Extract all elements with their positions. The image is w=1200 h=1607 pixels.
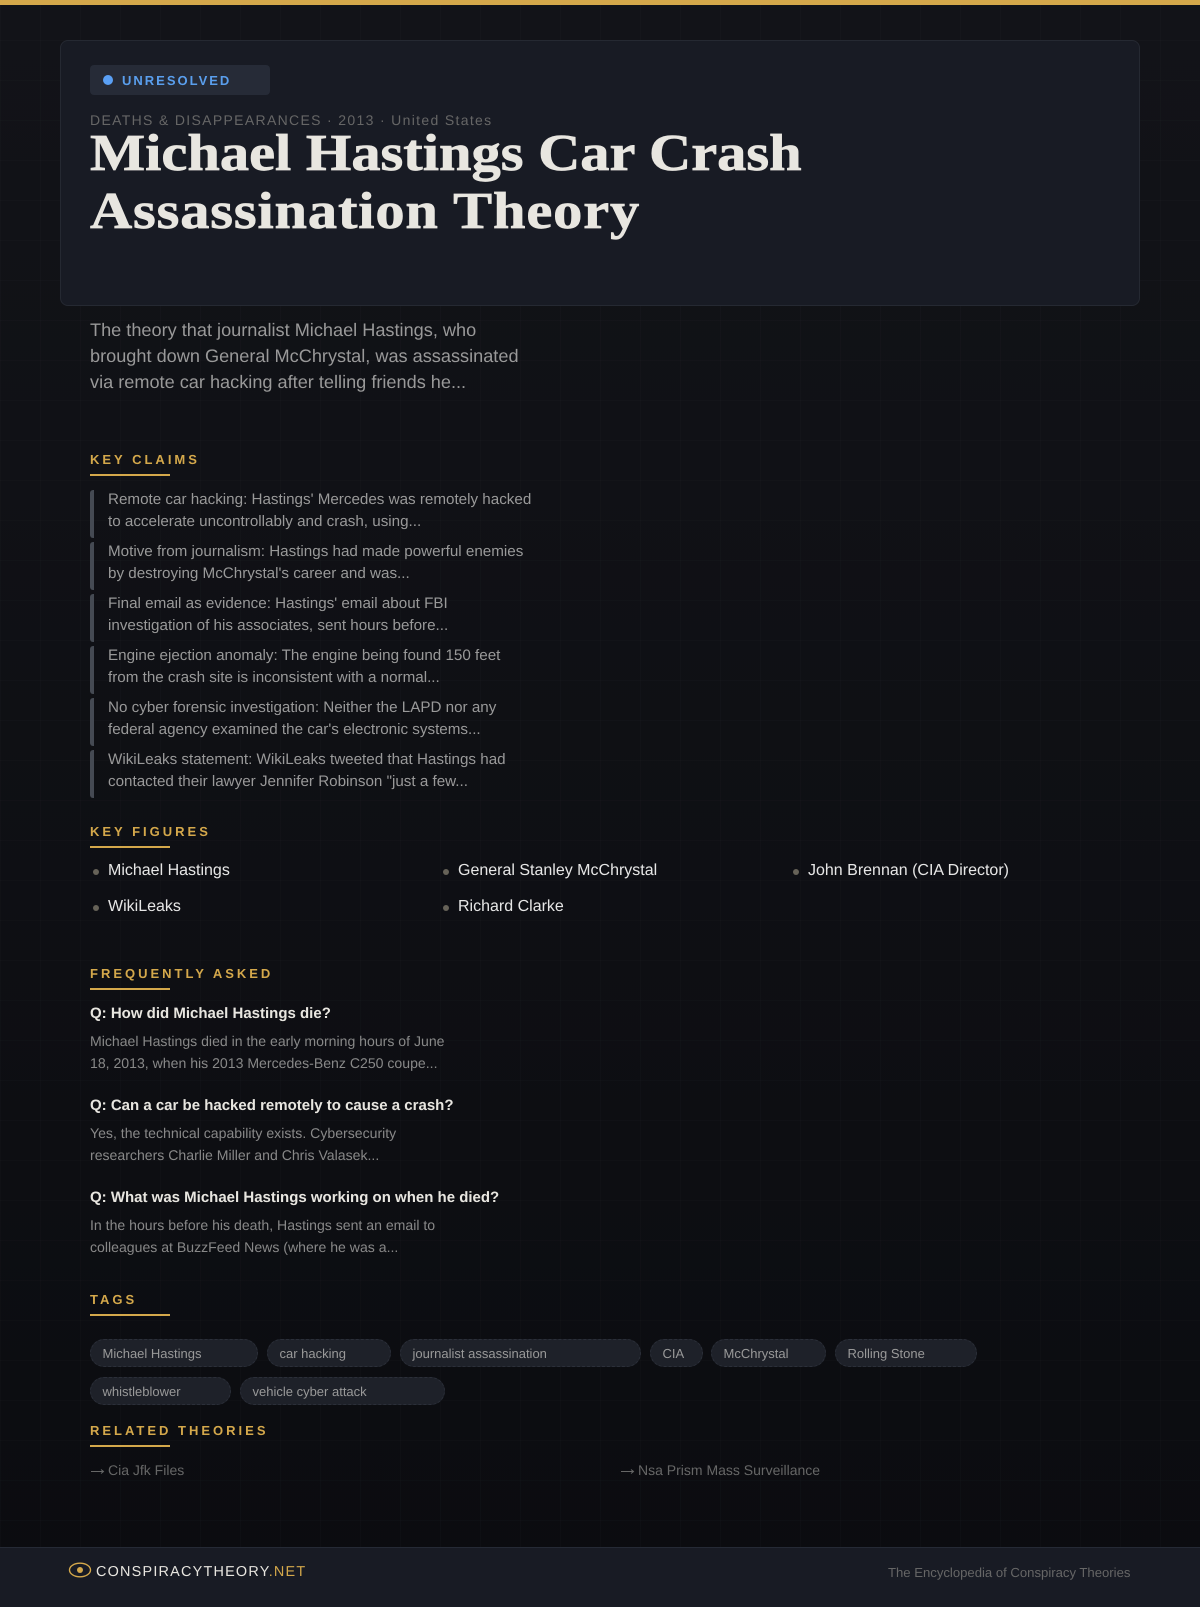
claim 6: contacted their lawyer Jennifer Robinson "just a few...	[108, 773, 468, 790]
tag list	[90, 1339, 977, 1405]
tag	[267, 1339, 391, 1367]
title	[90, 125, 802, 240]
heading: key claims: KEY CLAIMS	[90, 452, 200, 467]
question 1: Q: How did Michael Hastings die?	[90, 1005, 331, 1022]
footer	[0, 1547, 1200, 1607]
claim 3	[90, 594, 540, 642]
related link 1: Cia Jfk Files	[108, 1462, 184, 1478]
title: Michael Hastings Car Crash	[90, 125, 802, 182]
answer 2: researchers Charlie Miller and Chris Valasek...	[90, 1147, 379, 1163]
figure: John Brennan: John Brennan (CIA Director)	[808, 862, 1009, 879]
heading: frequently asked: FREQUENTLY ASKED	[90, 966, 273, 981]
tag: vehicle cyber attack	[252, 1384, 367, 1399]
tag	[650, 1339, 703, 1367]
lead summary: brought down General McChrystal, was assassinated	[90, 346, 519, 366]
tag: whistleblower	[102, 1384, 181, 1399]
answer 3	[90, 1217, 435, 1255]
claim 4: Engine ejection anomaly: The engine being found 150 feet	[108, 647, 500, 664]
figure: Richard Clarke: Richard Clarke	[458, 898, 564, 915]
answer 1: Michael Hastings died in the early morning hours of June	[90, 1033, 444, 1049]
icon: status dot	[103, 75, 113, 85]
lead summary	[90, 320, 519, 392]
claim 3: investigation of his associates, sent hours before...	[108, 617, 448, 634]
answer 1: 18, 2013, when his 2013 Mercedes-Benz C250 coupe...	[90, 1055, 438, 1071]
answer 1	[90, 1033, 444, 1071]
answer 2	[90, 1125, 396, 1163]
tag	[400, 1339, 641, 1367]
figures list	[93, 862, 1009, 915]
tag: Rolling Stone	[848, 1346, 925, 1361]
panel: header	[60, 40, 1140, 306]
claim 4: from the crash site is inconsistent with a normal...	[108, 669, 440, 686]
lead summary: The theory that journalist Michael Hastings, who	[90, 320, 476, 340]
answer 3: In the hours before his death, Hastings sent an email to	[90, 1217, 435, 1233]
question 2: Q: Can a car be hacked remotely to cause a crash?	[90, 1097, 454, 1114]
answer 2: Yes, the technical capability exists. Cybersecurity	[90, 1125, 396, 1141]
heading: key figures: KEY FIGURES	[90, 824, 211, 839]
icon: eye logo	[68, 1562, 92, 1578]
tag	[90, 1377, 231, 1405]
tag: CIA	[662, 1346, 684, 1361]
heading: related theories: RELATED THEORIES	[90, 1423, 268, 1438]
tag: McChrystal	[724, 1346, 789, 1361]
top accent bar	[0, 0, 1200, 5]
claim 1: to accelerate uncontrollably and crash, using...	[108, 513, 421, 530]
claim 1: Remote car hacking: Hastings' Mercedes was remotely hacked	[108, 491, 531, 508]
claim 6	[90, 750, 540, 798]
status badge	[90, 65, 270, 95]
tag	[240, 1377, 445, 1405]
lead summary: via remote car hacking after telling friends he...	[90, 372, 466, 392]
badge label: UNRESOLVED	[122, 73, 231, 88]
footer logo text: CONSPIRACYTHEORY.NET	[96, 1564, 306, 1580]
tag: Michael Hastings	[102, 1346, 202, 1361]
claim 2: by destroying McChrystal's career and was...	[108, 565, 410, 582]
figure: WikiLeaks: WikiLeaks	[108, 898, 181, 915]
footer tagline: The Encyclopedia of Conspiracy Theories	[888, 1565, 1130, 1580]
claim 5: No cyber forensic investigation: Neither the LAPD nor any	[108, 699, 496, 716]
tag: journalist assassination	[412, 1346, 547, 1361]
answer 3: colleagues at BuzzFeed News (where he was a...	[90, 1239, 398, 1255]
claim 2	[90, 542, 540, 590]
claim 5: federal agency examined the car's electronic systems...	[108, 721, 481, 738]
claim 4	[90, 646, 540, 694]
question 3: Q: What was Michael Hastings working on when he died?	[90, 1189, 499, 1206]
tag	[711, 1339, 826, 1367]
claim 3: Final email as evidence: Hastings' email about FBI	[108, 595, 448, 612]
tag: car hacking	[280, 1346, 346, 1361]
title: Assassination Theory	[90, 183, 640, 240]
claim 6: WikiLeaks statement: WikiLeaks tweeted that Hastings had	[108, 751, 506, 768]
tag	[90, 1339, 258, 1367]
tag	[835, 1339, 977, 1367]
claim 2: Motive from journalism: Hastings had made powerful enemies	[108, 543, 523, 560]
claim 1	[90, 490, 540, 538]
related link 2: Nsa Prism Mass Surveillance	[638, 1462, 820, 1478]
claim list	[90, 490, 531, 798]
category meta line: DEATHS & DISAPPEARANCES · 2013 · United States	[90, 112, 492, 128]
figure: Michael Hastings: Michael Hastings	[108, 862, 230, 879]
heading: tags: TAGS	[90, 1292, 137, 1307]
figure: General Stanley McChrystal: General Stanley McChrystal	[458, 862, 657, 879]
claim 5	[90, 698, 540, 746]
